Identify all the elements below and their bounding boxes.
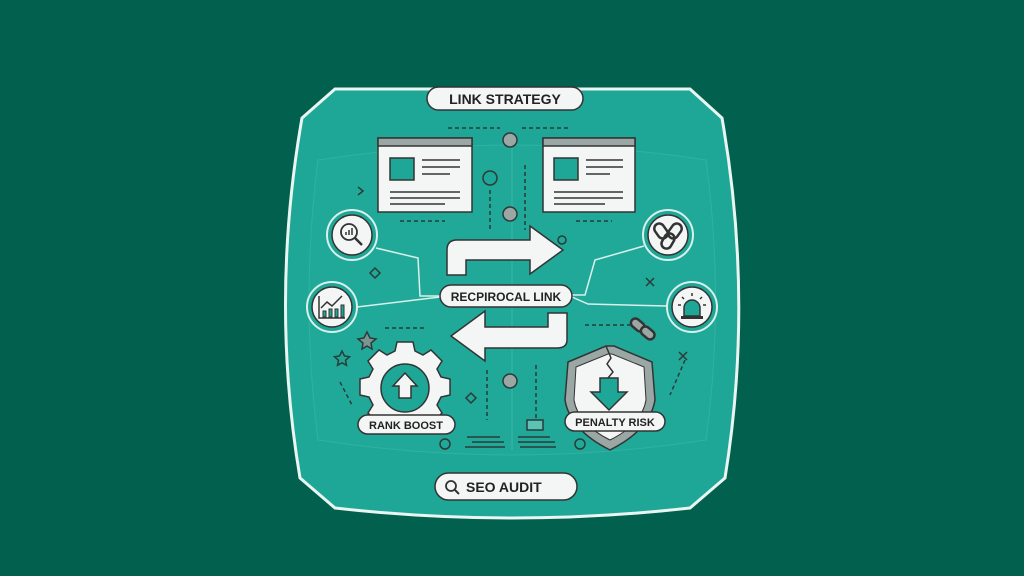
icon: chain links bbox=[643, 210, 693, 260]
title pill: LINK STRATEGY bbox=[449, 91, 562, 107]
icon: stars bbox=[334, 332, 376, 365]
pill: rank boost: RANK BOOST bbox=[369, 420, 443, 432]
pill: penalty risk: PENALTY RISK bbox=[575, 417, 655, 429]
decorative dashed lines and dots bbox=[340, 128, 687, 449]
title pill bbox=[427, 87, 583, 110]
arrow: right bbox=[447, 226, 563, 275]
pill: seo audit bbox=[435, 473, 577, 500]
icon: broken chain bbox=[629, 317, 656, 341]
pill: penalty risk bbox=[565, 412, 665, 431]
arrow: left bbox=[451, 311, 567, 361]
icon: growth chart bbox=[307, 282, 357, 332]
panel: main board bbox=[285, 89, 739, 518]
connector lines bbox=[357, 246, 667, 307]
pill: rank boost bbox=[358, 415, 455, 434]
pill: seo audit: SEO AUDIT bbox=[466, 479, 542, 495]
browser window left bbox=[378, 138, 472, 212]
icon: shield with down arrow bbox=[565, 346, 655, 450]
icon: search analytics bbox=[327, 210, 377, 260]
pill: reciprocal link bbox=[440, 285, 572, 307]
browser window right bbox=[543, 138, 635, 212]
icon: alarm bbox=[667, 282, 717, 332]
pill: reciprocal link: RECPIROCAL LINK bbox=[451, 290, 562, 304]
icon: gear with up arrow bbox=[360, 342, 450, 432]
